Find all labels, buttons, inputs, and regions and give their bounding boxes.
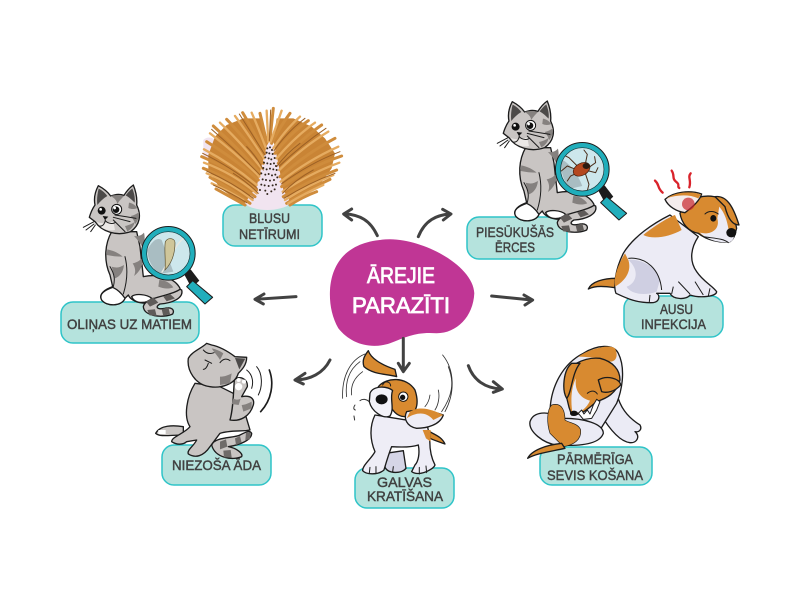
far ear xyxy=(715,196,739,225)
illustration: cat with hair nit under magnifier xyxy=(83,185,213,316)
label: blusu netīrumi: BLUSU xyxy=(249,210,290,226)
head xyxy=(680,196,737,242)
label: piesūkušās ērces xyxy=(467,217,567,259)
heat marks xyxy=(655,171,691,193)
thigh xyxy=(530,413,603,445)
label: niezoša āda xyxy=(162,445,271,485)
arrow to niezoša āda xyxy=(295,360,330,384)
illustration: dog with ear infection xyxy=(588,171,739,303)
near ear xyxy=(405,410,443,428)
far legs xyxy=(385,451,406,472)
label: ausu infekcija xyxy=(624,296,723,337)
body xyxy=(615,215,717,303)
water drops xyxy=(354,399,369,420)
label: ausu infekcija: AUSU xyxy=(660,301,693,317)
tail xyxy=(588,278,617,289)
illustration: cat with tick under magnifier xyxy=(497,101,627,232)
label: oliņas uz matiem xyxy=(61,302,199,343)
label: galvas kratīšana: GALVAS xyxy=(377,474,432,490)
lens: tick xyxy=(561,148,604,191)
label: galvas kratīšana xyxy=(355,468,454,508)
illustration: dog biting itself xyxy=(528,346,641,458)
label: blusu netīrumi xyxy=(223,205,322,246)
teeth xyxy=(578,399,600,419)
label: pārmērīga sevis košana: PĀRMĒRĪGA xyxy=(557,451,634,467)
label: piesūkušās ērces: PIESŪKUŠĀS xyxy=(476,224,554,240)
central blob: ārējie parazīti: PARAZĪTI xyxy=(352,293,450,318)
head xyxy=(378,380,417,417)
body xyxy=(363,415,435,474)
arrow to pārmērīga sevis košana xyxy=(468,366,502,392)
arrow to blusu netīrumi xyxy=(344,209,377,236)
motion lines xyxy=(343,354,452,412)
arrow to piesūkušās ērces xyxy=(418,209,451,237)
label: oliņas uz matiem: OLIŅAS UZ MATIEM xyxy=(67,316,192,332)
head xyxy=(188,343,247,387)
motion lines xyxy=(247,367,261,395)
arrow to galvas kratīšana xyxy=(398,338,409,372)
lens: hair nit xyxy=(147,232,190,275)
front legs xyxy=(600,393,641,443)
label: pārmērīga sevis košana xyxy=(540,447,652,485)
label: ausu infekcija: INFEKCIJA xyxy=(641,316,707,332)
label: pārmērīga sevis košana: SEVIS KOŠANA xyxy=(547,467,644,483)
label: niezoša āda: NIEZOŠA ĀDA xyxy=(172,457,262,473)
tail xyxy=(430,432,445,444)
flying ear xyxy=(363,351,397,377)
illustration: flea dirt in fur xyxy=(202,108,342,210)
infected ear xyxy=(665,192,702,213)
back xyxy=(550,346,623,430)
label: blusu netīrumi: NETĪRUMI xyxy=(239,226,300,242)
arrow to oliņas uz matiem xyxy=(255,294,296,304)
head xyxy=(565,358,620,415)
tail xyxy=(528,443,565,458)
central blob: ārējie parazīti: ĀREJIE xyxy=(367,263,435,288)
label: piesūkušās ērces: ĒRCES xyxy=(495,239,535,255)
central blob: ārējie parazīti xyxy=(330,239,474,346)
orange patch xyxy=(548,404,581,447)
illustration: dog shaking head xyxy=(343,351,452,474)
illustration: scratching cat xyxy=(156,343,272,458)
label: galvas kratīšana: KRATĪŠANA xyxy=(367,488,444,504)
arrow to ausu infekcija xyxy=(492,295,533,305)
